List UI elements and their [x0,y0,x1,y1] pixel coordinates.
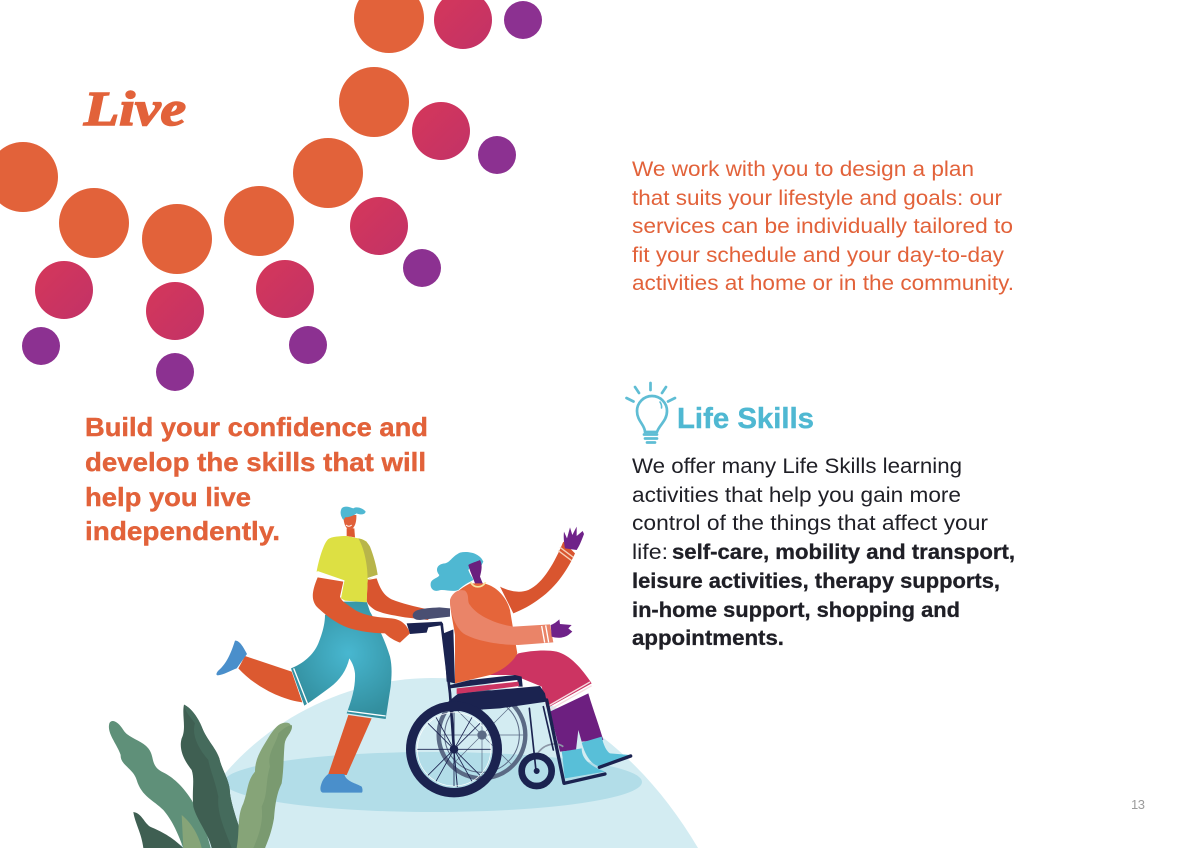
rider face [468,560,483,585]
head and neck [341,507,366,537]
illustration: hill background [180,678,698,848]
rider raised arm [500,542,575,613]
man front arm [313,577,410,643]
rider legs [550,693,603,752]
shirt [317,536,378,602]
headline: help you live [85,482,251,512]
rider raised hand [564,527,584,550]
intro paragraph: services can be individually tailored to [632,214,1013,238]
life skills paragraph: life: [632,540,668,564]
illustration: plants [109,705,292,848]
intro paragraph: activities at home or in the community. [632,271,1014,295]
rider torso [450,583,517,683]
back leg and foot [216,641,302,702]
front leg and foot [320,715,372,793]
main wheel [411,706,497,793]
life skills heading: Life Skills [677,403,814,435]
intro paragraph: We work with you to design a plan [632,157,974,181]
headline: Build your confidence and [85,412,428,442]
rider lower hand [551,619,572,638]
life skills paragraph: activities that help you gain more [632,483,961,507]
caster back arc [537,744,563,755]
life skills paragraph: leisure activities, therapy supports, [632,570,1000,593]
shorts [291,602,392,719]
wheelchair frame [442,624,631,787]
skirt [490,650,592,708]
intro paragraph: fit your schedule and your day-to-day [632,243,1004,267]
illustration: man pushing wheelchair [216,507,428,793]
man back arm [367,578,428,620]
back wheel [439,692,525,778]
caster wheel [522,756,552,786]
intro paragraph [632,157,1014,295]
life skills paragraph: We offer many Life Skills learning [632,454,962,478]
life skills paragraph: appointments. [632,627,784,650]
backrest cushion [443,629,455,683]
rider boots [562,737,630,778]
life skills paragraph: self-care, mobility and transport, [672,541,1015,564]
life skills paragraph: control of the things that affect your [632,511,988,535]
page number: 13 [1131,797,1145,812]
seat [448,675,547,712]
title: Live [83,81,186,136]
headline: develop the skills that will [85,447,426,477]
headline [85,412,428,546]
pink seat strip [457,682,519,694]
headline: independently. [85,516,280,546]
intro paragraph: that suits your lifestyle and goals: our [632,186,1002,210]
illustration: wheelchair and rider [407,527,631,793]
rider hair [431,552,483,591]
rider front arm [450,590,553,645]
life skills paragraph [632,454,1015,650]
life skills paragraph: in-home support, shopping and [632,599,960,622]
decorative dot pattern [0,0,542,391]
icon: light bulb [626,383,675,442]
armrest cushion [413,607,450,620]
push handle [407,622,443,634]
